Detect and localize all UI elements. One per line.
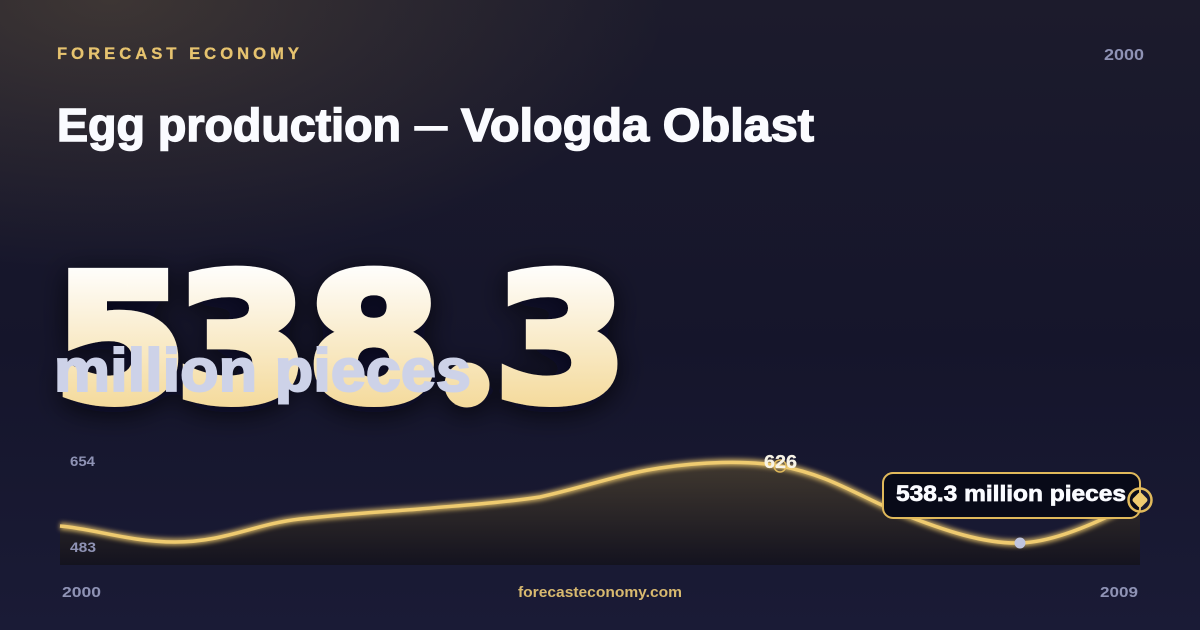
big value: 8 (307, 238, 441, 442)
x axis start label: 2000 (62, 584, 101, 601)
big value: 3 (494, 238, 628, 442)
title: Egg production (57, 99, 401, 151)
axis max label: 654 (70, 454, 96, 469)
latest value marker (1128, 488, 1152, 512)
peak marker (774, 460, 786, 472)
big value: 5 (53, 238, 187, 442)
peak value label: 626 (764, 452, 797, 472)
callout: 538.3 million pieces (896, 481, 1126, 506)
source url: forecasteconomy.com (518, 585, 682, 601)
title: Vologda Oblast (461, 99, 814, 151)
year label, top right: 2000 (1104, 47, 1144, 64)
unit label: million pieces (54, 337, 471, 404)
chart line (60, 462, 1140, 543)
low point marker (1014, 538, 1026, 548)
big value: . (453, 344, 478, 414)
axis min label: 483 (70, 540, 97, 555)
callout (883, 473, 1140, 518)
big value: 3 (175, 238, 309, 442)
chart area fill (60, 462, 1140, 565)
eyebrow: brand name: FORECAST ECONOMY (57, 45, 303, 63)
line chart (60, 452, 1152, 565)
chart line glow (60, 462, 1140, 543)
x axis end label: 2009 (1100, 584, 1138, 601)
title: — (415, 108, 447, 144)
big value (53, 238, 628, 442)
